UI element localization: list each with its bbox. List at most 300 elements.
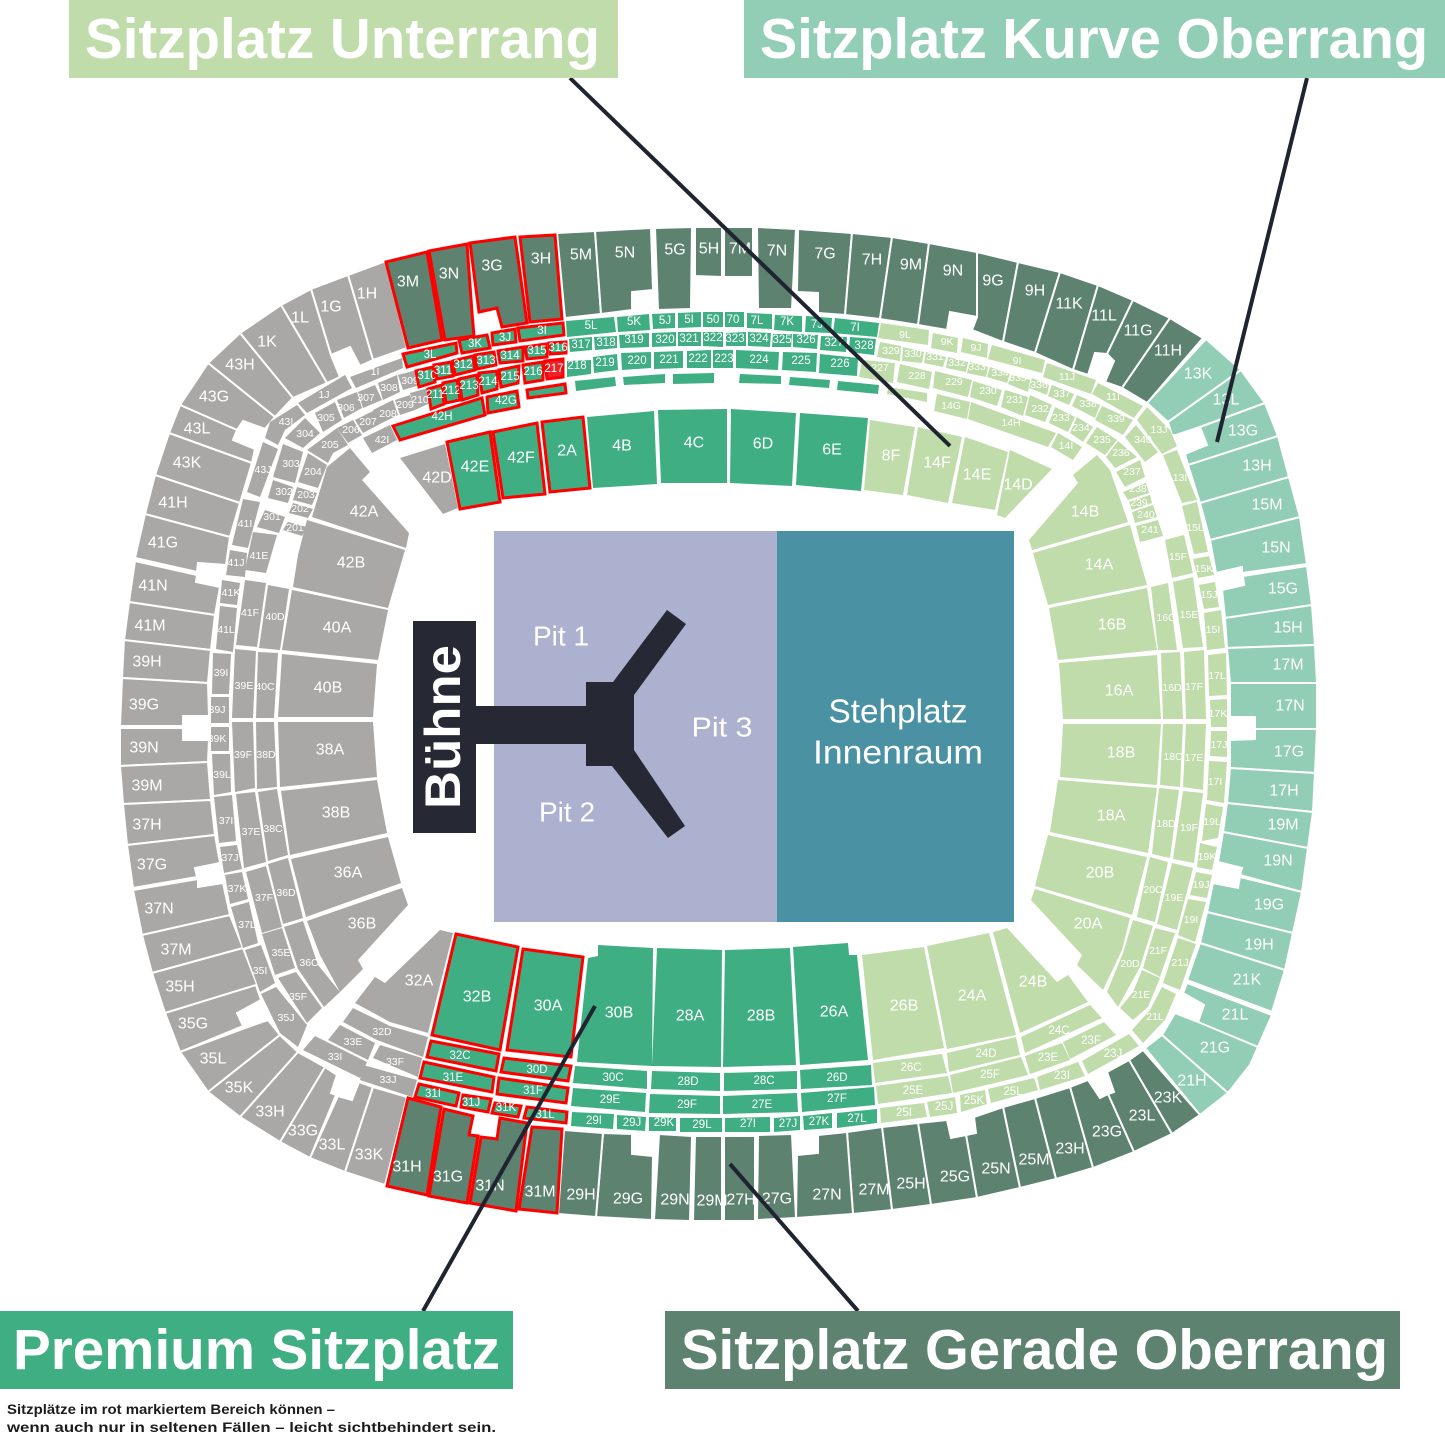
seat 35H: 35H	[165, 978, 195, 996]
seat 41K: 41K	[222, 587, 240, 599]
seat 11J	[1043, 363, 1096, 394]
seat 26D	[800, 1065, 872, 1089]
seat 27J: 27J	[779, 1118, 797, 1130]
seat 7I	[833, 318, 879, 337]
seat 42I	[363, 425, 397, 453]
stehplatz innenraum: Innenraum	[813, 734, 983, 770]
seat 311: 311	[434, 365, 452, 377]
seat 306	[337, 392, 362, 418]
seat 3K: 3K	[468, 338, 482, 350]
seat 7K	[774, 315, 802, 332]
pit area	[494, 531, 777, 922]
seat 1K: 1K	[257, 334, 277, 350]
seat 209	[395, 395, 415, 415]
seat 18C	[1160, 724, 1183, 787]
seat 27F	[801, 1087, 875, 1112]
seat 223: 223	[714, 353, 734, 365]
seat 5J: 5J	[659, 315, 671, 327]
seat 15F: 15F	[1169, 551, 1187, 563]
seat 33I: 33I	[328, 1051, 342, 1063]
seat 230	[970, 381, 1002, 406]
seat 40A	[282, 590, 388, 660]
seat 9N: 9N	[943, 262, 963, 280]
seat 17J: 17J	[1211, 739, 1227, 751]
seat 37H	[123, 800, 215, 845]
seat 333: 333	[968, 361, 986, 373]
seat 41H	[145, 475, 240, 537]
seat 213: 213	[459, 380, 479, 392]
seat 306: 306	[337, 402, 355, 414]
seat 19I	[1178, 899, 1206, 942]
seat 38D	[256, 722, 277, 789]
seat 43H	[208, 333, 293, 417]
seat 3M: 3M	[397, 274, 419, 290]
heading: Sitzplatz Unterrang: Sitzplatz Unterrang	[85, 7, 600, 71]
seat 9G	[972, 252, 1018, 342]
seat 21J	[1163, 938, 1196, 990]
seat 35L	[180, 1020, 280, 1092]
seat 42F	[493, 423, 545, 498]
seat 228	[897, 364, 932, 389]
label pit 2: Pit 2	[539, 796, 595, 828]
seat 29H	[558, 1130, 603, 1217]
seat 33K	[345, 1087, 407, 1185]
footnote text: Sitzplätze im rot markiertem Bereich können –	[7, 1401, 335, 1417]
seat 37N: 37N	[144, 900, 174, 918]
seat 27G: 27G	[762, 1190, 792, 1208]
seat 202: 202	[291, 503, 309, 515]
seat 241: 241	[1141, 524, 1159, 536]
seat 327: 327	[824, 337, 844, 349]
label pit 1: Pit 1	[533, 620, 589, 652]
seat 29H: 29H	[566, 1186, 596, 1204]
seat 332	[946, 357, 968, 372]
seat 222	[687, 350, 711, 368]
seat 317: 317	[571, 339, 591, 351]
panel: standing floor	[413, 531, 1014, 922]
seat 212	[441, 380, 461, 403]
seat 37M: 37M	[160, 942, 192, 958]
seat 27H: 27H	[726, 1192, 756, 1208]
seat 1J: 1J	[318, 389, 330, 401]
seat 209: 209	[396, 399, 414, 411]
seat 41E: 41E	[250, 550, 268, 562]
seat 14H: 14H	[1001, 417, 1021, 429]
seat 37I: 37I	[219, 815, 233, 827]
seat 309: 309	[401, 375, 419, 387]
seat 238	[1123, 483, 1149, 500]
seat 25M: 25M	[1018, 1152, 1050, 1168]
seat 14A	[1033, 525, 1147, 605]
seat 307: 307	[357, 392, 375, 404]
seat 37I	[214, 795, 236, 843]
seat 42E	[447, 432, 500, 509]
seat 33E	[328, 1025, 375, 1060]
seat 35K	[208, 1035, 298, 1117]
seat 217	[544, 359, 564, 379]
seat 233: 233	[1052, 412, 1070, 424]
seat 335	[1008, 372, 1030, 392]
seat 21J: 21J	[1172, 957, 1188, 969]
seat 26B	[862, 947, 944, 1060]
seat 211	[426, 385, 444, 409]
seat 23I: 23I	[1054, 1070, 1070, 1082]
seat 37M	[142, 915, 243, 973]
seat 42A	[312, 448, 409, 548]
seat 225: 225	[791, 355, 811, 367]
heading: Sitzplatz Kurve Oberrang: Sitzplatz Kurve Oberrang	[760, 7, 1428, 71]
seat 35L: 35L	[200, 1050, 226, 1068]
seat 21K	[1187, 943, 1285, 1012]
seat 40A: 40A	[323, 620, 352, 636]
seat 41M	[124, 602, 215, 650]
seat 207	[355, 410, 382, 433]
seat 5N: 5N	[615, 244, 635, 262]
arrow: gerade oberrang	[730, 1164, 858, 1311]
seat 3G: 3G	[481, 258, 503, 274]
seat 41J	[226, 550, 247, 577]
seat 32C: 32C	[449, 1050, 471, 1062]
seat 39E	[232, 649, 256, 718]
seat 39G	[120, 678, 209, 726]
seat 37E: 37E	[242, 826, 260, 838]
seat 3H: 3H	[531, 250, 551, 268]
seat 13H: 13H	[1242, 458, 1272, 474]
panel: upper tier dark green bottom	[558, 1050, 1200, 1221]
seat 325: 325	[772, 334, 792, 346]
seat 234: 234	[1072, 422, 1090, 434]
seat 324: 324	[749, 333, 769, 345]
seat 5K	[617, 314, 650, 332]
seat 18A: 18A	[1097, 808, 1126, 824]
seat 30A	[507, 949, 583, 1057]
seat 35E: 35E	[272, 947, 290, 959]
seat 40C: 40C	[255, 681, 275, 693]
seat 221: 221	[659, 354, 679, 366]
seat 5L	[566, 317, 616, 337]
seat 235: 235	[1093, 434, 1111, 446]
seat 36C: 36C	[299, 957, 319, 969]
seat 225	[782, 352, 817, 372]
seat 315: 315	[527, 345, 547, 357]
seat 304: 304	[296, 428, 314, 440]
seat 19E	[1157, 863, 1193, 930]
seat 230: 230	[979, 385, 997, 397]
seat 39K: 39K	[208, 733, 226, 745]
seat 43J	[247, 442, 278, 497]
seat 30D: 30D	[526, 1064, 548, 1076]
seat 35I	[245, 945, 275, 992]
seat 19J: 19J	[1193, 879, 1209, 891]
seat 19N: 19N	[1263, 852, 1293, 870]
seat 218	[567, 360, 591, 377]
seat 26C: 26C	[900, 1062, 922, 1074]
seat 27K	[803, 1113, 832, 1130]
seat 18B: 18B	[1107, 744, 1135, 762]
seat 26A: 26A	[820, 1004, 849, 1020]
seat 11I	[1092, 383, 1143, 418]
arrow: unterrang	[570, 78, 950, 446]
seat 31J: 31J	[462, 1097, 480, 1109]
seat 302	[268, 480, 293, 503]
seat 43K: 43K	[173, 454, 202, 472]
seat 41F: 41F	[241, 607, 259, 619]
seat 35I: 35I	[253, 965, 267, 977]
seat 17E: 17E	[1185, 752, 1203, 764]
seat 25L	[988, 1078, 1038, 1103]
seat 237: 237	[1123, 466, 1141, 478]
seat 13J	[1137, 407, 1177, 454]
seat 19G	[1207, 877, 1302, 933]
seat 23E	[1025, 1043, 1070, 1074]
seat 3I: 3I	[537, 325, 547, 337]
seat 13G: 13G	[1228, 422, 1258, 440]
seat 37L	[231, 902, 258, 948]
seat 29K: 29K	[654, 1117, 675, 1129]
seat 37E	[236, 792, 266, 868]
seat 15M: 15M	[1251, 496, 1283, 514]
seat 13K	[1147, 339, 1241, 422]
panel: lower ring bottom right light green	[873, 1005, 1139, 1123]
stage: catwalk	[476, 610, 686, 838]
seat 20C: 20C	[1143, 884, 1163, 896]
seat 240	[1132, 505, 1157, 523]
seat 42A: 42A	[350, 504, 379, 520]
seat 15H	[1225, 605, 1315, 648]
seat 231	[1001, 390, 1028, 416]
seat 332: 332	[948, 357, 966, 369]
seat 331	[924, 351, 946, 367]
seat 217: 217	[544, 363, 564, 375]
seat 33H: 33H	[255, 1104, 285, 1120]
seat 4B	[587, 411, 657, 488]
seat 37N	[133, 879, 230, 935]
seat 19E: 19E	[1165, 892, 1183, 904]
seat 312	[453, 356, 475, 375]
seat 70	[725, 312, 744, 327]
seat 213	[459, 375, 479, 400]
seat 35G: 35G	[178, 1016, 208, 1032]
seat 317	[569, 337, 592, 352]
seat 301: 301	[263, 511, 281, 523]
seat 39J: 39J	[209, 704, 225, 716]
seat 40D	[259, 585, 289, 650]
seat 208	[373, 400, 398, 423]
seat 33G: 33G	[288, 1122, 318, 1140]
seat 21E	[1120, 970, 1160, 1020]
seat 25F	[950, 1057, 1028, 1093]
seat 19F	[1173, 791, 1203, 863]
seat 15L	[1182, 502, 1208, 554]
seat 25J	[927, 1097, 957, 1117]
seat 19H: 19H	[1244, 936, 1274, 954]
seat 33J: 33J	[380, 1074, 396, 1086]
seat 308: 308	[380, 382, 398, 394]
seat 7M: 7M	[729, 240, 751, 258]
label pit 3: Pit 3	[692, 712, 752, 742]
seat 17K	[1209, 699, 1227, 727]
seat 223	[713, 350, 734, 368]
seat 219: 219	[595, 357, 615, 369]
seat 21H: 21H	[1177, 1072, 1207, 1090]
seat 39H: 39H	[132, 654, 162, 670]
seat 36B: 36B	[348, 916, 376, 932]
seat 38A	[278, 722, 377, 787]
seat 7J: 7J	[811, 319, 823, 331]
seat 39F: 39F	[234, 749, 252, 761]
seat 28D	[651, 1071, 720, 1091]
seat 5H	[695, 227, 722, 277]
seat 14E	[952, 437, 1008, 510]
seat 5N	[595, 228, 653, 314]
seat 235	[1086, 427, 1117, 455]
seat 19N	[1218, 832, 1308, 892]
seat 234	[1070, 417, 1093, 442]
seat 25I	[880, 1103, 927, 1123]
seat 6E: 6E	[822, 442, 842, 458]
seat 37G	[127, 835, 220, 888]
seat 37K	[225, 872, 248, 904]
seat 5H: 5H	[699, 240, 719, 258]
arrow: leader lines	[423, 78, 1307, 1311]
seat 43J: 43J	[255, 464, 271, 476]
seat 14A: 14A	[1085, 556, 1114, 574]
seat 4C	[658, 409, 727, 483]
seat 18A	[1050, 780, 1157, 853]
seat 38B: 38B	[322, 804, 350, 822]
seat 8F	[864, 420, 915, 495]
seat 202	[289, 503, 313, 518]
seat 41L: 41L	[217, 624, 235, 636]
seat 210	[410, 388, 430, 410]
seat 35H	[152, 948, 258, 1013]
seat 219	[593, 354, 618, 373]
seat 7G	[797, 229, 852, 315]
seat 319: 319	[624, 334, 644, 346]
seat 27J	[774, 1116, 800, 1132]
seat 16A	[1059, 655, 1161, 719]
seat 40B: 40B	[314, 680, 342, 696]
seat 3K	[459, 335, 490, 353]
seat 29E: 29E	[600, 1094, 621, 1106]
seat 30B: 30B	[605, 1004, 633, 1022]
seat 50	[703, 312, 723, 327]
seat 208: 208	[379, 408, 397, 420]
seat 20D	[1107, 920, 1153, 1007]
seat 335: 335	[1009, 372, 1027, 384]
footnote text: wenn auch nur in seltenen Fällen – leicht sichtbehindert sein.	[6, 1419, 496, 1435]
seat 15L: 15L	[1186, 522, 1204, 534]
seat 27G	[757, 1134, 796, 1220]
seat 309	[398, 370, 420, 390]
seat 21F	[1143, 928, 1175, 977]
seat 7L: 7L	[751, 315, 764, 327]
seat 26D: 26D	[826, 1072, 848, 1084]
seat 31L: 31L	[535, 1109, 555, 1121]
seat 33H	[240, 1052, 325, 1142]
seat 236	[1106, 441, 1137, 468]
seat 1G: 1G	[320, 298, 342, 316]
seat 201	[283, 522, 307, 536]
seat 37J: 37J	[222, 852, 238, 864]
seat 7I: 7I	[850, 322, 860, 334]
seat 24B	[993, 928, 1088, 1033]
seat 14D	[997, 450, 1052, 518]
seat 43I: 43I	[279, 416, 293, 428]
seat 19L	[1202, 804, 1223, 841]
seat 31L	[524, 1107, 567, 1123]
seat 31K	[492, 1102, 521, 1117]
seat 25E	[876, 1076, 952, 1104]
seat 319	[619, 333, 649, 348]
seat 7K: 7K	[780, 316, 794, 328]
seat 5M: 5M	[570, 246, 592, 264]
seat 43L: 43L	[184, 420, 210, 438]
seat 17N: 17N	[1275, 698, 1305, 714]
seat 229: 229	[945, 376, 963, 388]
seat 42H: 42H	[431, 411, 453, 423]
seat 330: 330	[904, 348, 922, 360]
heading: Premium Sitzplatz: Premium Sitzplatz	[13, 1318, 500, 1382]
seat 1L: 1L	[291, 310, 309, 326]
seat 303: 303	[282, 458, 300, 470]
seat 28C	[724, 1071, 797, 1091]
seat 233	[1049, 407, 1075, 432]
seat 216	[523, 362, 543, 383]
seat 11K	[1035, 272, 1098, 370]
seat 35F: 35F	[289, 991, 307, 1003]
seat 336: 336	[1030, 379, 1048, 391]
seat 24D	[947, 1037, 1020, 1072]
seat 5G	[655, 227, 692, 310]
seat 227: 227	[871, 362, 889, 374]
seat 13G	[1185, 403, 1278, 465]
seat 29N: 29N	[660, 1192, 690, 1208]
seat 31I	[415, 1084, 459, 1106]
seat 17F: 17F	[1185, 681, 1203, 693]
seat 3N: 3N	[439, 266, 459, 282]
seat 42G	[487, 391, 519, 413]
seat 32A: 32A	[405, 972, 434, 990]
seat 224	[736, 350, 779, 370]
seat 15F	[1165, 535, 1193, 578]
seat 25I: 25I	[896, 1107, 912, 1119]
seat 17G	[1230, 729, 1317, 773]
seat 36D: 36D	[276, 887, 296, 899]
seat 39J	[209, 697, 229, 723]
seat 320: 320	[655, 334, 675, 346]
seat 11H	[1122, 318, 1203, 403]
seat 205: 205	[321, 439, 339, 451]
seat 14G: 14G	[941, 400, 961, 412]
seat 18D: 18D	[1156, 818, 1176, 830]
seat 214	[478, 371, 498, 393]
seat 3L	[403, 343, 457, 367]
seat 31N	[470, 1118, 527, 1211]
seat 39N	[120, 728, 209, 766]
seat 29K	[649, 1117, 676, 1131]
panel: red top block obstructed view	[386, 235, 590, 509]
seat 7N	[757, 227, 796, 309]
seat 227	[859, 360, 895, 383]
seat 11J: 11J	[1059, 371, 1075, 383]
seat 29F: 29F	[677, 1099, 697, 1111]
seat 17L: 17L	[1208, 670, 1226, 682]
seat 3I	[518, 323, 564, 341]
seat 18D	[1152, 788, 1179, 858]
seat 331: 331	[926, 351, 944, 363]
seat 24A: 24A	[958, 988, 987, 1004]
